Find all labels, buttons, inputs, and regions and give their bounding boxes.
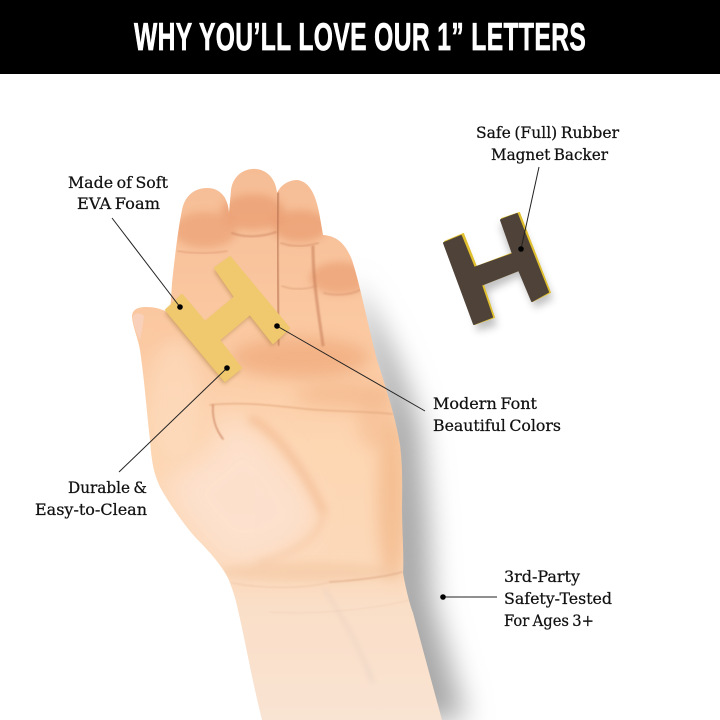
foam letter H on palm	[165, 257, 289, 384]
callout: Modern Font Beautiful Colors: Beautiful Colors	[433, 416, 561, 435]
callout: Made of Soft EVA Foam: EVA Foam	[77, 194, 160, 213]
callout: Modern Font Beautiful Colors: Modern Font	[433, 394, 538, 413]
callout: Made of Soft EVA Foam: Made of Soft	[68, 173, 169, 192]
callout: Made of Soft EVA Foam	[68, 173, 183, 310]
hand cast shadow	[350, 280, 466, 720]
callout: 3rd-Party Safety-Tested For Ages 3+: For Ages 3+	[504, 611, 594, 630]
heading: WHY YOU’LL LOVE OUR 1” LETTERS	[134, 15, 586, 58]
finger tip shading	[173, 194, 370, 294]
magnet letter H	[444, 212, 553, 331]
callout: 3rd-Party Safety-Tested For Ages 3+: Safety-Tested	[504, 589, 612, 608]
callout: Safe (Full) Rubber Magnet Backer: Magnet Backer	[491, 145, 608, 164]
callout: 3rd-Party Safety-Tested For Ages 3+	[440, 567, 612, 630]
life line shading	[250, 418, 324, 513]
callout: Durable and Easy-to-Clean: Easy-to-Clean	[35, 500, 147, 519]
callout: Safe (Full) Rubber Magnet Backer	[476, 123, 619, 252]
thumb nail	[133, 313, 144, 340]
magnet letter shadow	[462, 219, 553, 331]
palm and wrist creases	[177, 192, 403, 612]
hand photo illustration	[132, 169, 442, 720]
callout: Durable and Easy-to-Clean	[35, 365, 230, 519]
thumb mound	[165, 410, 315, 565]
callout: Modern Font Beautiful Colors	[274, 323, 561, 435]
callout: 3rd-Party Safety-Tested For Ages 3+: 3rd-Party	[504, 567, 580, 586]
header bar	[0, 0, 720, 74]
callout: Durable and Easy-to-Clean: Durable &	[68, 478, 147, 497]
callout: Safe (Full) Rubber Magnet Backer: Safe (Full) Rubber	[476, 123, 619, 142]
palm shading	[230, 338, 370, 378]
